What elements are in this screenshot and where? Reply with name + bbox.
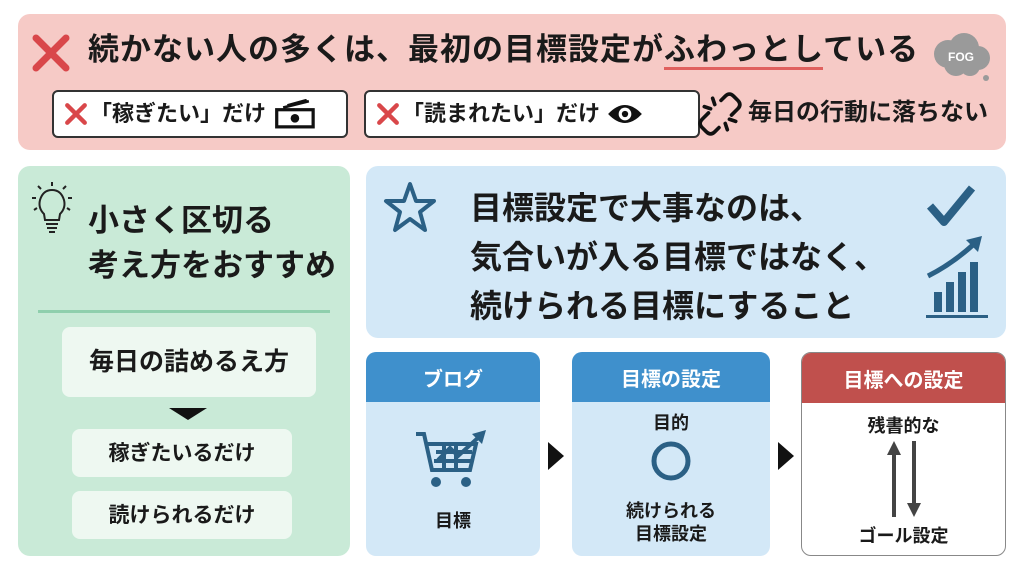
icon: red cross (32, 34, 70, 72)
box: 毎日の詰めるえ方: 毎日の詰めるえ方 (89, 348, 289, 376)
icon: lightbulb (32, 182, 72, 233)
arrow: right 1 (548, 442, 564, 470)
panel: blue key message (366, 166, 1006, 338)
icon: cart with chart (416, 430, 486, 487)
card: ブログ: ブログ (423, 368, 483, 390)
panel: top problem (18, 14, 1006, 150)
text: message: 気合いが入る目標ではなく、 (470, 239, 886, 275)
heading: 小さく区切る: 小さく区切る (88, 203, 274, 238)
card: 目標への設定: 目標への設定 (844, 370, 964, 392)
icon: fog cloud: FOG (948, 50, 974, 64)
card: 目標への設定 (801, 352, 1006, 556)
heading: 小さく区切る (88, 203, 336, 283)
text: 続けられる目標設定 (626, 501, 716, 544)
icon: circle (652, 442, 690, 480)
text: message: 続けられる目標にすること (470, 288, 854, 324)
arrow: right 2 (778, 442, 794, 470)
arrow: down triangle (169, 408, 207, 420)
heading: 小さく区切る: 考え方をおすすめ (88, 248, 336, 283)
title: 続かない人の多くは、最初の目標設定がふわっとしている (88, 32, 919, 67)
box: 読まれたいだけ (364, 90, 700, 138)
icon: check and growth chart (926, 186, 988, 318)
box: 稼ぎたいるだけ (72, 429, 292, 477)
text: 目的: 目的 (653, 413, 689, 433)
icon: star (384, 182, 436, 232)
box: 読けられるだけ (72, 491, 292, 539)
text: 続けられる目標設定: 目標設定 (635, 524, 707, 544)
text: ゴール設定: ゴール設定 (858, 526, 948, 546)
box: 稼ぎたいだけ: 「稼ぎたい」だけ (90, 101, 266, 126)
card: ブログ (366, 352, 540, 556)
box: 稼ぎたいるだけ: 稼ぎたいるだけ (108, 442, 256, 464)
card: 目標の設定 (572, 352, 770, 556)
box: 読まれたいだけ: 「読まれたい」だけ (402, 101, 600, 126)
box: 稼ぎたいだけ (52, 90, 348, 138)
text: message: 目標設定で大事なのは、 (470, 190, 822, 226)
icon: fog cloud (934, 33, 990, 81)
text: 残書的な: 残書的な (868, 416, 940, 436)
box: 毎日の詰めるえ方 (62, 327, 316, 397)
text: message (470, 190, 886, 324)
card: 目標の設定: 目標の設定 (621, 368, 721, 390)
icon: up/down arrows (887, 441, 921, 517)
box: 読けられるだけ: 読けられるだけ (108, 504, 256, 526)
icon: broken link (698, 92, 742, 136)
text: 毎日の行動に落ちない: 毎日の行動に落ちない (748, 99, 988, 126)
text: 目標: 目標 (435, 511, 471, 531)
panel: left green (18, 166, 350, 556)
text: 続けられる目標設定: 続けられる (626, 501, 716, 521)
